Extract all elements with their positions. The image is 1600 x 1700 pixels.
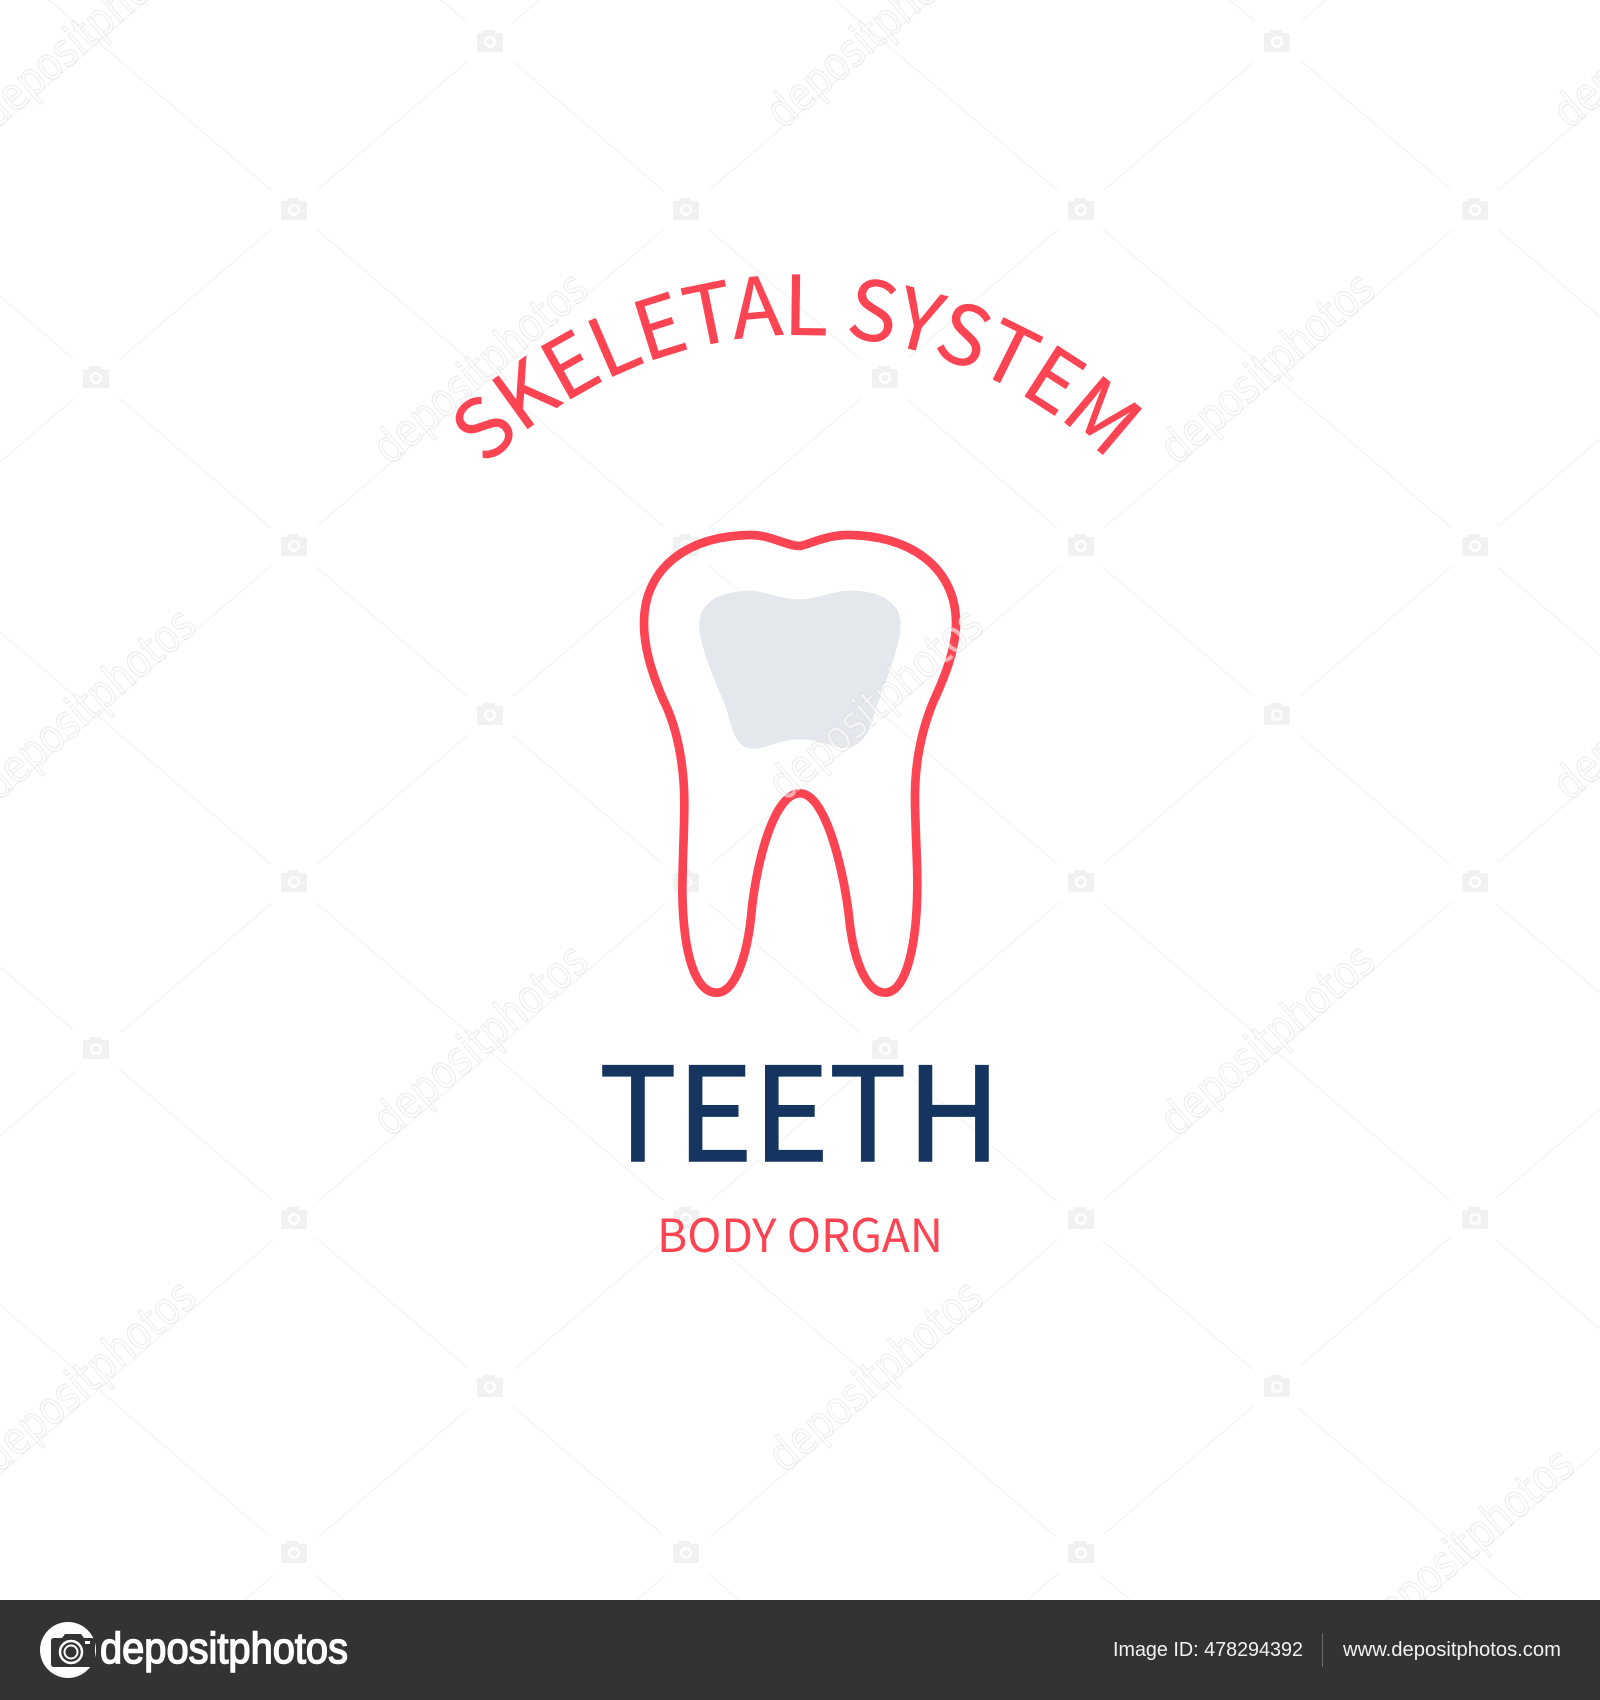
icon: camera logo bbox=[40, 1622, 96, 1678]
watermark text marks: depositphotos bbox=[362, 933, 598, 1146]
curved heading: skeletal system: SKELETAL SYSTEM bbox=[456, 274, 1142, 458]
image id: Image ID: 478294392 bbox=[1113, 1638, 1303, 1661]
footer bar bbox=[0, 1600, 1600, 1700]
title: teeth: TEETH bbox=[599, 1011, 1001, 1199]
icon: tooth bbox=[644, 535, 956, 993]
tooth pulp bbox=[699, 591, 901, 749]
curved heading: skeletal system bbox=[456, 274, 1142, 458]
site url: www.depositphotos.com bbox=[1342, 1638, 1561, 1661]
watermark text marks: depositphotos bbox=[1149, 933, 1385, 1146]
subtitle: body organ: BODY ORGAN bbox=[657, 1200, 943, 1266]
watermark text marks: depositphotos bbox=[1149, 261, 1385, 474]
watermark text marks: depositphotos bbox=[362, 261, 598, 474]
watermark text marks: depositphotos bbox=[757, 1269, 993, 1482]
tooth outline bbox=[644, 535, 956, 993]
logo wordmark: depositphotos bbox=[100, 1624, 348, 1673]
watermark text marks: depositphotos bbox=[757, 597, 993, 810]
